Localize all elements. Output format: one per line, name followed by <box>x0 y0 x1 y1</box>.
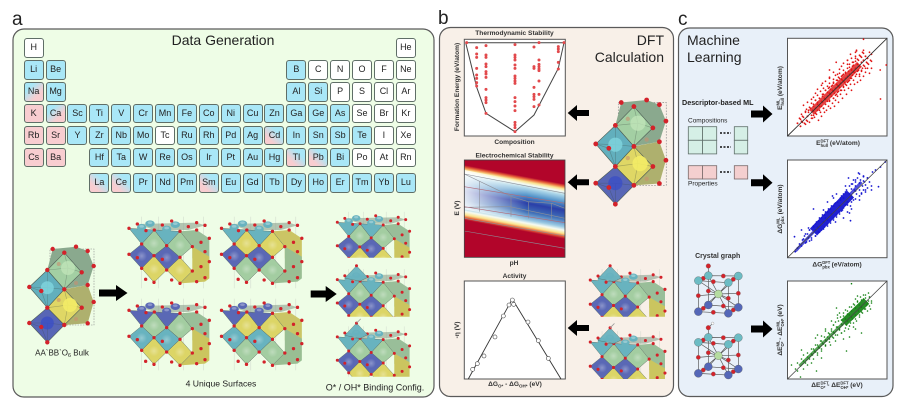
periodic table: Ho <box>312 177 324 187</box>
scatter plot: Pourbaix free energy: (eV/atom) <box>830 262 862 269</box>
scatter plot: hull energy: E <box>777 105 784 110</box>
periodic table: O <box>359 64 366 74</box>
arrow: surfaces to binding configurations <box>311 286 337 302</box>
periodic table: He <box>400 42 412 52</box>
periodic table: Pr <box>139 177 148 187</box>
periodic table: Ti <box>96 108 103 118</box>
periodic table: Li <box>30 64 37 74</box>
periodic table: Bi <box>336 152 344 162</box>
scatter plot: hull energy: E <box>816 140 820 147</box>
scatter plot: hull energy: hull <box>821 143 828 148</box>
periodic table: Mg <box>49 86 62 96</box>
periodic table: Hf <box>95 152 104 162</box>
chart: activity volcano: - ΔG <box>503 381 519 388</box>
chart: electrochemical stability: E (V) <box>454 200 461 216</box>
arrow: to activity <box>568 320 589 336</box>
periodic table: Tm <box>356 177 369 187</box>
periodic table: Sm <box>202 177 216 187</box>
periodic table: W <box>139 152 147 162</box>
periodic table: Re <box>159 152 171 162</box>
periodic table: Nd <box>159 177 171 187</box>
arrow: to thermodynamic stability <box>568 105 589 121</box>
chart: activity volcano: O* <box>498 384 504 388</box>
periodic table: Yb <box>378 177 389 187</box>
panel letter b: b <box>438 8 449 29</box>
scatter plot: hull energy: DFT <box>820 138 829 144</box>
chart: electrochemical stability <box>454 152 565 267</box>
scatter plot: binding energy: OH* <box>840 385 849 390</box>
scatter plot: Pourbaix free energy: (eV/atom) <box>777 184 784 216</box>
scatter plot: binding energy: O* <box>821 385 826 390</box>
scatter plot: Pourbaix free energy <box>776 160 887 270</box>
periodic table: Mo <box>137 130 149 140</box>
periodic table: Be <box>50 64 61 74</box>
periodic table: Ca <box>50 108 61 118</box>
scatter plot: hull energy: ML <box>776 99 780 105</box>
periodic table: Ru <box>181 130 193 140</box>
periodic table: N <box>337 64 343 74</box>
periodic table: V <box>118 108 124 118</box>
periodic table: Cd <box>269 130 280 140</box>
scatter plot: binding energy: - ΔE <box>825 382 841 389</box>
periodic table: At <box>380 152 388 162</box>
surface slab 1 <box>129 217 209 288</box>
label: compositions: Compositions <box>688 118 728 125</box>
bulk crystal structure <box>29 247 94 342</box>
scatter plot: hull energy: (eV/atom) <box>828 140 860 147</box>
label: properties: Properties <box>688 180 718 188</box>
periodic table: Sr <box>51 130 60 140</box>
periodic table: Eu <box>225 177 236 187</box>
periodic table: Rb <box>28 130 39 140</box>
periodic table: Sn <box>313 130 324 140</box>
periodic table: Cs <box>28 152 39 162</box>
binding configuration 1 <box>336 212 412 258</box>
periodic table <box>24 38 416 193</box>
heading: Machine Learning: Learning <box>687 49 742 65</box>
periodic table: Ce <box>115 177 127 187</box>
periodic table: Cr <box>138 108 148 118</box>
chart: electrochemical stability: pH <box>510 260 519 267</box>
binding configuration 2 <box>336 264 412 317</box>
periodic table: Gd <box>247 177 259 187</box>
periodic table: Ta <box>116 152 126 162</box>
panel: DFT calculation background <box>440 28 674 396</box>
periodic table: Er <box>336 177 345 187</box>
periodic table: Co <box>203 108 215 118</box>
chart: activity volcano: -η (V) <box>454 322 461 338</box>
surface slab 4 <box>221 299 302 370</box>
periodic table: B <box>293 64 299 74</box>
periodic table: Ga <box>290 108 302 118</box>
scatter plot: binding energy: (eV) <box>777 304 784 319</box>
scatter plot: hull energy: (eV/atom) <box>777 66 784 98</box>
scatter plot: binding energy: DFT <box>820 380 829 386</box>
label: binding configurations: O* / OH* Binding Config. <box>326 383 424 393</box>
periodic table: Tc <box>161 130 170 140</box>
label: bulk: AA`BB`O <box>35 349 68 358</box>
periodic table: Lu <box>401 177 411 187</box>
periodic table: Ne <box>400 64 412 74</box>
periodic table: Fe <box>182 108 192 118</box>
heading: DFT Calculation: DFT <box>637 32 664 48</box>
periodic table: Mn <box>159 108 171 118</box>
periodic table: Na <box>28 86 39 96</box>
periodic table: Os <box>181 152 193 162</box>
label: descriptor-based ML: Descriptor-based ML <box>682 98 754 107</box>
chart: activity volcano: ΔG <box>488 381 498 388</box>
periodic table: Al <box>292 86 300 96</box>
periodic table: Ba <box>50 152 61 162</box>
scatter plot: hull energy: hull <box>780 98 785 105</box>
chart: activity volcano: OH* <box>519 384 528 388</box>
binding configuration 3 <box>336 318 412 377</box>
periodic table: Cu <box>247 108 258 118</box>
chart: electrochemical stability: Electrochemical Stability <box>475 152 554 160</box>
periodic table: Se <box>357 108 368 118</box>
panel: data generation background <box>13 29 434 397</box>
scatter plot: binding energy: (eV) <box>848 382 863 389</box>
scatter plot: Pourbaix free energy: ML <box>776 217 780 224</box>
periodic table: Dy <box>291 177 302 187</box>
chart: thermodynamic stability: Composition <box>494 139 535 146</box>
scatter plot: binding energy: OH* <box>780 318 785 327</box>
periodic table: Zn <box>269 108 280 118</box>
chart: thermodynamic stability: Formation Energy (eV/atom) <box>454 43 461 131</box>
periodic table: Cl <box>380 86 388 96</box>
scatter plot: binding energy <box>776 281 887 390</box>
scatter plot: binding energy: ΔE <box>811 382 820 389</box>
arrow: crystal graph to binding plot <box>751 320 772 338</box>
heading: Machine Learning: Machine <box>687 32 740 48</box>
structure: DFT O* configuration <box>588 264 666 317</box>
scatter plot: Pourbaix free energy: pbx <box>822 265 830 270</box>
periodic table: C <box>315 64 322 74</box>
periodic table: Sc <box>72 108 83 118</box>
periodic table: Tb <box>269 177 280 187</box>
periodic table: Pb <box>313 152 324 162</box>
properties vector <box>688 166 748 179</box>
arrow: to electrochemical stability <box>568 174 589 190</box>
chart: activity volcano: Activity <box>503 273 527 280</box>
periodic table: Te <box>357 130 367 140</box>
scatter plot: binding energy: ML <box>776 320 780 327</box>
arrow: properties to free energy plot <box>751 174 772 191</box>
periodic table: Si <box>314 86 322 96</box>
periodic table: I <box>383 130 385 140</box>
periodic table: K <box>31 108 37 118</box>
periodic table: Hg <box>269 152 280 162</box>
scatter plot: binding energy: ΔE <box>777 347 784 356</box>
structure: DFT bulk <box>596 100 666 204</box>
chart: activity volcano <box>454 273 565 388</box>
periodic table: As <box>335 108 345 118</box>
periodic table: Ag <box>247 130 258 140</box>
surface slab 3 <box>129 299 209 370</box>
label: bulk: Bulk <box>71 349 90 358</box>
periodic table: Ge <box>312 108 324 118</box>
panel letter a: a <box>12 9 23 30</box>
scatter plot: Pourbaix free energy: ΔG <box>777 224 784 234</box>
periodic table: Rn <box>400 152 412 162</box>
surface slab 2 <box>221 217 302 288</box>
periodic table: Pm <box>180 177 194 187</box>
scatter plot: binding energy: ML <box>776 340 780 347</box>
periodic table: Br <box>379 108 388 118</box>
scatter plot: binding energy: DFT <box>840 380 849 386</box>
scatter plot: binding energy: - ΔE <box>777 326 784 342</box>
chart: activity volcano: (eV) <box>528 381 542 388</box>
periodic table: Sb <box>335 130 346 140</box>
structure: DFT OH* configuration <box>588 323 666 379</box>
periodic table: Y <box>74 130 80 140</box>
periodic table: Rh <box>203 130 215 140</box>
periodic table: F <box>381 64 387 74</box>
arrow: bulk to surfaces <box>99 285 128 301</box>
panel letter c: c <box>678 9 688 30</box>
periodic table: P <box>337 86 343 96</box>
periodic table: H <box>30 42 37 52</box>
periodic table: Au <box>247 152 258 162</box>
scatter plot: Pourbaix free energy: ΔG <box>812 262 822 269</box>
periodic table: Zr <box>95 130 104 140</box>
label: surfaces: 4 Unique Surfaces <box>186 379 256 389</box>
periodic table: Ar <box>401 86 410 96</box>
crystal graph OH* <box>694 322 742 379</box>
scatter plot: binding energy: O* <box>780 341 785 346</box>
panel: machine learning background <box>678 28 893 396</box>
periodic table: Ni <box>226 108 235 118</box>
scatter plot: Pourbaix free energy: pbx <box>780 216 785 224</box>
periodic table: Nb <box>115 130 127 140</box>
chart: thermodynamic stability: Thermodynamic Stability <box>475 30 554 37</box>
periodic table: Ir <box>206 152 212 162</box>
crystal graph O* <box>694 264 742 317</box>
periodic table: S <box>359 86 365 96</box>
label: bulk: 6 <box>68 353 71 359</box>
periodic table: Pt <box>226 152 235 162</box>
periodic table: Kr <box>401 108 410 118</box>
arrow: descriptor to energy plot <box>751 106 772 122</box>
periodic table: In <box>293 130 300 140</box>
scatter plot: Pourbaix free energy: DFT <box>822 260 831 265</box>
periodic table: Xe <box>400 130 411 140</box>
scatter plot: hull energy <box>776 38 887 148</box>
periodic table: Po <box>357 152 368 162</box>
heading: DFT Calculation: Calculation <box>595 49 664 65</box>
chart: thermodynamic stability <box>454 30 565 146</box>
periodic table: Pd <box>225 130 236 140</box>
periodic table: La <box>94 177 104 187</box>
heading: Data Generation: Data Generation <box>172 32 274 48</box>
composition matrix <box>688 127 748 154</box>
label: crystal graph: Crystal graph <box>695 253 740 260</box>
periodic table: Tl <box>293 152 300 162</box>
